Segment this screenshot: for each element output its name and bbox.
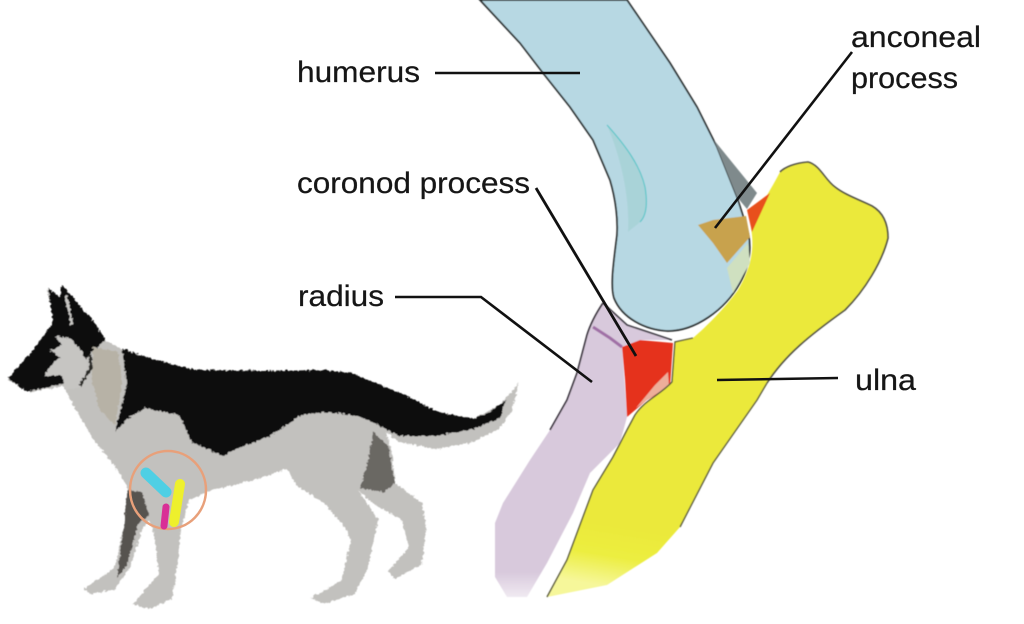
- leader line: radius: [395, 297, 592, 382]
- leader line: anconeal process: [715, 52, 852, 228]
- small radius highlight: [164, 507, 166, 526]
- illustration: elbow joint bones: [480, 0, 888, 597]
- joint highlight: [727, 243, 750, 293]
- orange-red anconeal edge: [747, 193, 770, 232]
- radius outline: [550, 303, 603, 430]
- humerus teal ridge edge: [607, 125, 646, 222]
- radius purple mark: [593, 327, 622, 347]
- bone: humerus: [480, 0, 750, 331]
- bone: ulna: [547, 162, 888, 597]
- label: radius: radius: [298, 280, 384, 313]
- black saddle and tail: [115, 349, 506, 456]
- label: coronod process: coronod process: [297, 167, 530, 200]
- black head and ears: [8, 285, 105, 392]
- small humerus highlight: [146, 473, 166, 492]
- grey wedge behind humerus: [714, 140, 757, 209]
- coronoid pink tip: [636, 372, 669, 408]
- label: anconeal process: process: [851, 62, 958, 95]
- ear highlight: [66, 296, 72, 325]
- hind leg shading: [360, 432, 395, 492]
- ulna left outline: [547, 338, 693, 597]
- elbow highlight circle: [130, 451, 206, 529]
- neck ruff: [92, 347, 122, 425]
- dark neck stripe: [80, 355, 91, 386]
- small ulna highlight: [174, 484, 180, 522]
- ulna upper outline: [767, 162, 888, 383]
- leader line: humerus: [435, 72, 580, 74]
- humerus teal ridge: [607, 125, 646, 232]
- label: humerus: humerus: [297, 56, 420, 89]
- anconeal process: [698, 216, 750, 263]
- bone: radius: [495, 303, 672, 597]
- radius top edge: [603, 303, 672, 340]
- leader line: coronoid process: [536, 188, 636, 356]
- front leg shading: [117, 490, 149, 578]
- dog body: [8, 285, 519, 609]
- grey cheek patch: [44, 336, 88, 390]
- bone: coronoid process red: [622, 340, 673, 417]
- illustration: German shepherd with highlighted elbow: [8, 285, 519, 609]
- ulna lower outline: [680, 383, 767, 527]
- leader line: ulna: [717, 378, 838, 380]
- label: anconeal process: anconeal: [851, 21, 981, 54]
- label: ulna: ulna: [855, 364, 916, 397]
